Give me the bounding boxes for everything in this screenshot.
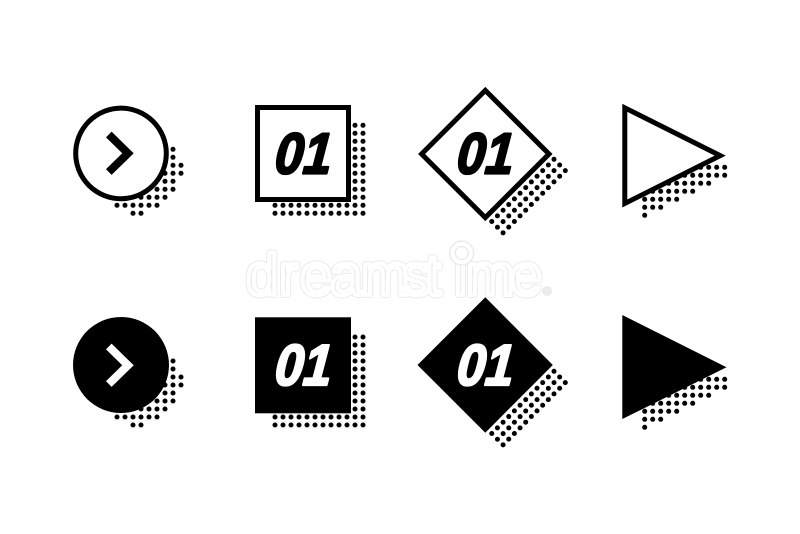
diamond outline: [422, 90, 549, 218]
number: 01: [273, 121, 335, 186]
square outline: [258, 108, 348, 200]
halftone dots: square bottom: [275, 337, 364, 426]
chevron: [109, 134, 128, 172]
triangle outline: [625, 108, 720, 204]
halftone dots: triangle top: [645, 167, 725, 215]
halftone dots: circle top: [117, 149, 181, 213]
icon: filled triangle: [622, 315, 726, 427]
halftone dots: triangle bottom: [645, 379, 725, 427]
chevron: [109, 346, 128, 384]
circle outline: [76, 108, 166, 199]
filled circle: [73, 317, 169, 413]
filled square: [255, 317, 351, 413]
halftone dots: square top: [275, 125, 364, 214]
icon: filled diamond with number: [418, 297, 565, 445]
halftone dots: diamond bottom: [492, 371, 565, 445]
icon: filled circle with chevron: [73, 317, 181, 425]
icon: filled square with number: [255, 317, 364, 426]
filled triangle: [622, 315, 726, 419]
halftone dots: circle bottom: [117, 361, 181, 425]
icon: outlined triangle: [625, 108, 725, 215]
number: 01: [273, 332, 335, 398]
icon: outlined diamond with number: [422, 90, 565, 233]
icon: outlined circle with chevron: [76, 108, 181, 213]
number: 01: [455, 121, 517, 186]
watermark: dreamstime: dreamstime: [246, 243, 542, 308]
filled diamond: [418, 297, 553, 433]
watermark: dreamstime: dreamstime: [246, 243, 542, 308]
number: 01: [455, 332, 517, 398]
icon: outlined square with number: [258, 108, 364, 214]
halftone dots: diamond top: [492, 159, 565, 233]
